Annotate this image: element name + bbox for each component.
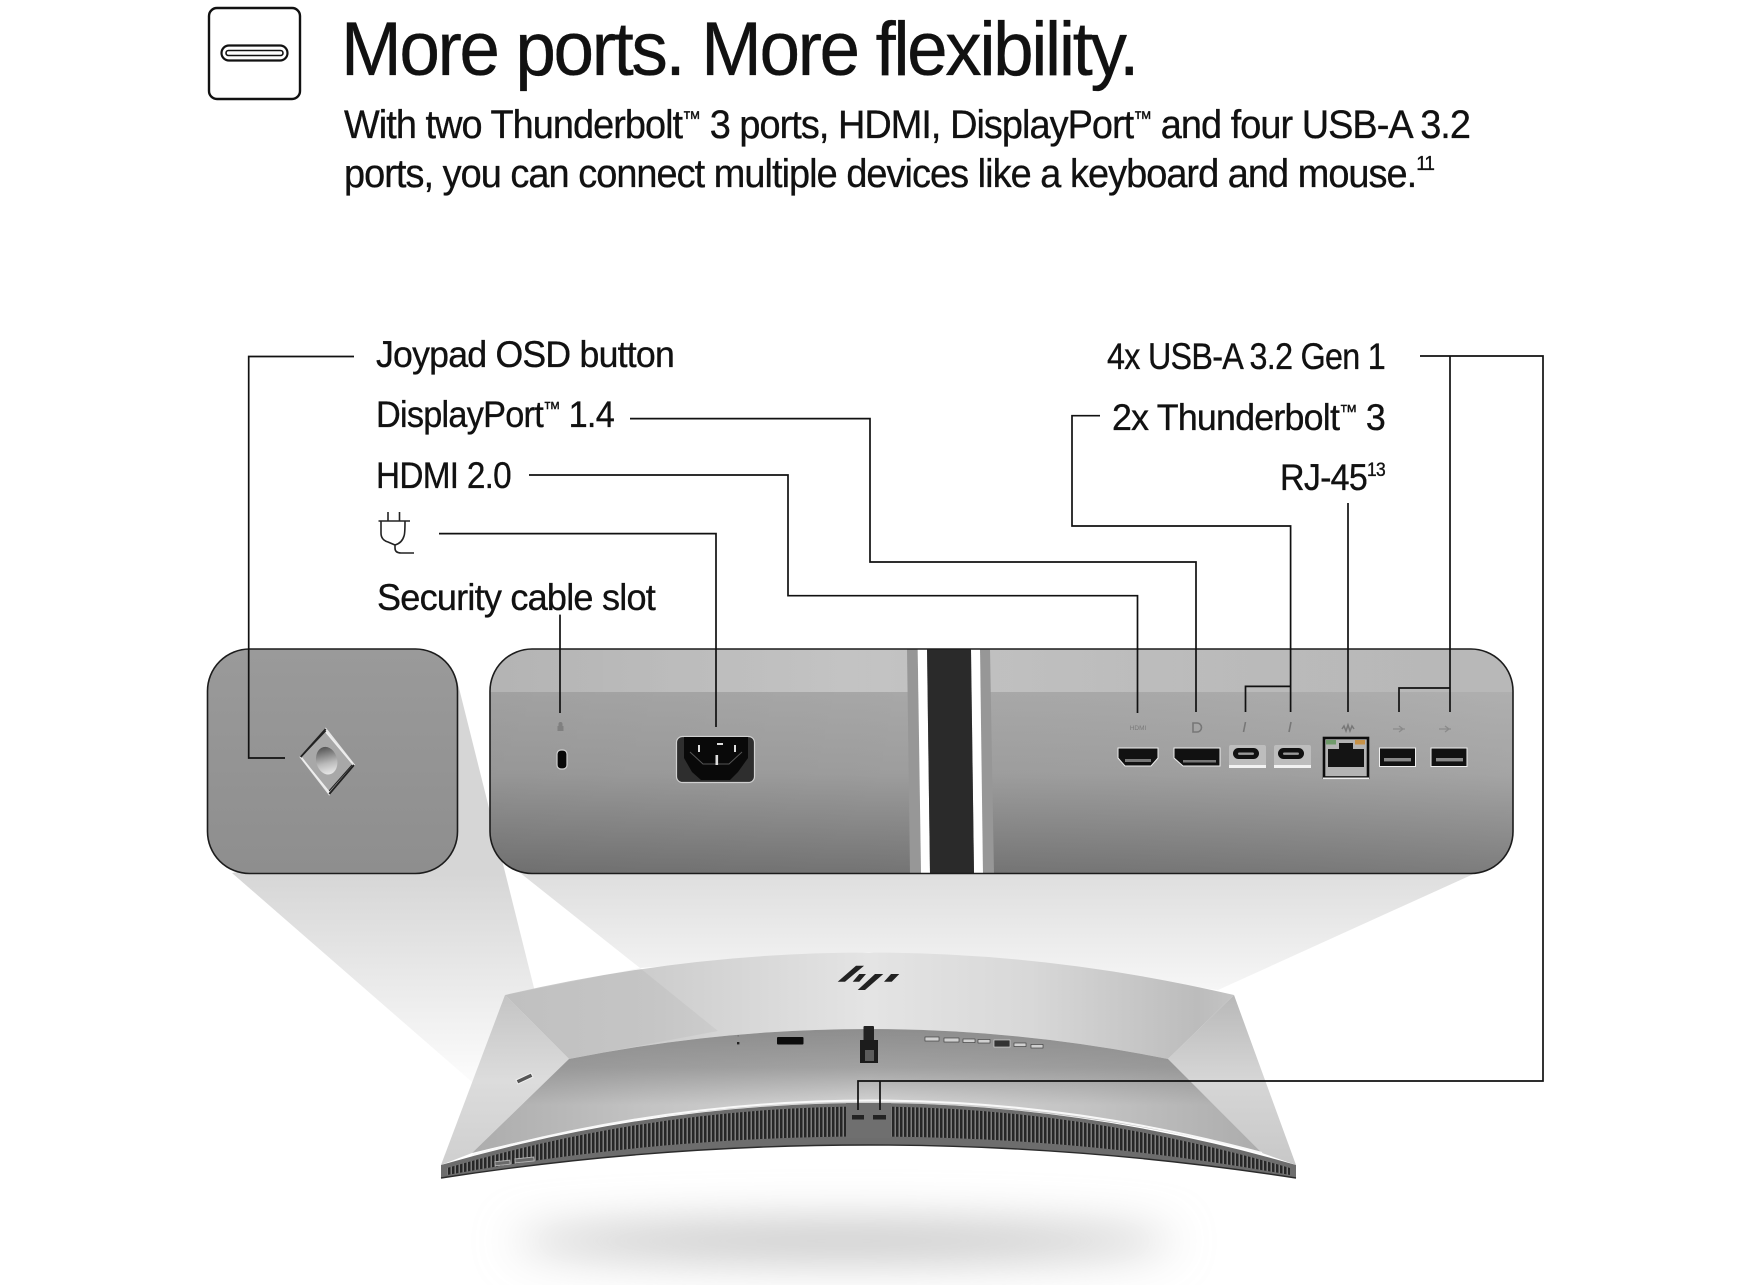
HP logo: [838, 966, 899, 990]
panel: joypad close-up: [208, 649, 458, 874]
mini ports: right group: [925, 1037, 1043, 1048]
leader line: joypad: [249, 356, 354, 758]
label: Joypad OSD button: Joypad OSD button: [376, 334, 674, 375]
stand: dark spine with white edges: [918, 649, 983, 874]
label: 2x Thunderbolt 3: 2x Thunderbolt: [1112, 397, 1347, 438]
beam overlay on top face: [505, 968, 718, 1059]
label: RJ-45: RJ-45: [1280, 457, 1375, 498]
subtitle line 1: and four USB-A 3.2: [1151, 103, 1470, 147]
leader line: USB-A: [858, 356, 1543, 1110]
bottom edge shadow: [441, 1145, 1296, 1178]
label: 4x USB-A 3.2 Gen 1: 4x USB-A 3.2 Gen 1: [1107, 336, 1385, 377]
rear USB ports: [852, 1115, 886, 1120]
port: USB-A 1: [1380, 748, 1416, 766]
label: 2x Thunderbolt 3: ™: [1339, 402, 1357, 423]
side joypad: [516, 1073, 533, 1084]
icon: lock: [558, 722, 564, 731]
subtitle line 2: 11: [1416, 153, 1435, 175]
monitor: right side panel: [1168, 995, 1296, 1165]
recess side shading: [472, 1029, 1262, 1153]
label: HDMI 2.0: HDMI 2.0: [376, 455, 511, 496]
shadow under monitor: [514, 1222, 1174, 1260]
leader line: power: [439, 534, 716, 727]
subtitle line 1: With two Thunderbolt: [344, 103, 701, 147]
port: RJ-45: [1323, 738, 1369, 779]
stand mount: [860, 1026, 878, 1063]
rear centre plate: [846, 1103, 891, 1138]
port: DisplayPort: [1174, 748, 1220, 766]
label: 2x Thunderbolt 3: 3: [1357, 397, 1385, 438]
icon labels above ports: [1130, 722, 1451, 732]
port: Thunderbolt 2: [1274, 745, 1311, 768]
title: More ports. More flexibility.: [341, 7, 1137, 92]
mini ports: power and lock: [737, 1035, 804, 1044]
white lip highlight: [472, 1100, 1262, 1155]
icon: joypad button: [301, 729, 354, 794]
security slot: [557, 750, 567, 769]
subtitle line 2: ports, you can connect multiple devices like a keyboard and mouse.: [344, 152, 1476, 196]
port: USB-A 2: [1431, 748, 1467, 766]
label: Security cable slot: Security cable slot: [377, 577, 656, 618]
projection beam: ports: [519, 872, 1478, 990]
label: DisplayPort 1.4: DisplayPort: [376, 394, 556, 435]
label: DisplayPort 1.4: 1.4: [560, 394, 614, 435]
icon labels above ports: HDMI: [1130, 725, 1146, 732]
label: RJ-45: 13: [1367, 460, 1385, 481]
monitor: top face: [505, 952, 1234, 1059]
monitor: front band: [441, 1103, 1296, 1178]
leader line: security slot: [559, 615, 561, 713]
subtitle line 1: 3 ports, HDMI, DisplayPort: [700, 103, 1134, 147]
subtitle line 1: ™: [1133, 108, 1151, 130]
icon: power plug: [378, 512, 414, 553]
icon: USB-C port: [209, 8, 300, 99]
port: HDMI: [1118, 748, 1158, 766]
projection beam: joypad: [232, 680, 536, 1082]
panel: ports close-up: [490, 649, 1513, 874]
port: Thunderbolt 1: [1229, 745, 1266, 768]
leader line: DisplayPort: [630, 419, 1196, 712]
monitor: recessed back: [472, 1029, 1262, 1153]
leader line: RJ-45: [1347, 503, 1349, 712]
stand: side strips: [907, 649, 994, 874]
leader line: HDMI: [529, 475, 1138, 713]
power socket: [676, 736, 754, 782]
monitor: vents: [447, 1106, 1290, 1175]
monitor rear view: [441, 952, 1296, 1178]
subtitle line 1: ™: [682, 108, 700, 130]
monitor: left side panel: [441, 995, 569, 1165]
label: DisplayPort 1.4: ™: [543, 399, 560, 420]
side ports: [495, 1157, 534, 1166]
leader line: Thunderbolt: [1072, 416, 1291, 712]
